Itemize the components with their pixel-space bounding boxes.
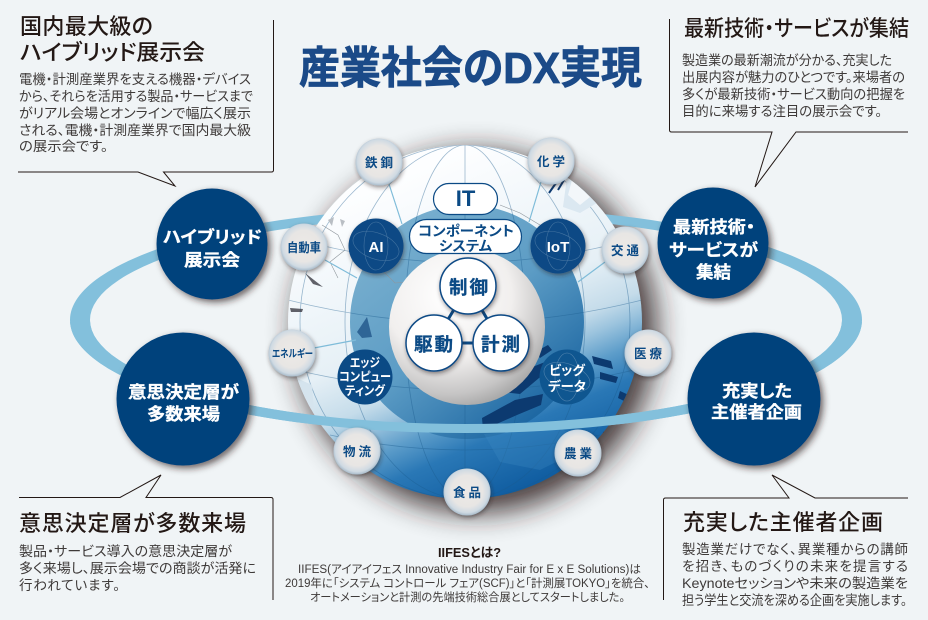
panel body: 製品・サービス導入の意思決定層が: [19, 544, 233, 559]
panel heading: [20, 14, 205, 65]
industry sphere: medical: [624, 330, 672, 376]
callout outline: [670, 19, 908, 187]
panel: about IIFES: [285, 545, 650, 604]
node: hybrid exhibition: 展示会: [184, 251, 240, 270]
callout outline: [18, 20, 274, 186]
about heading: IIFESとは?: [438, 545, 501, 560]
panel body: 製造業の最新潮流が分かる、充実した: [682, 53, 892, 68]
industry sphere: agriculture: [554, 430, 602, 476]
node: organizer programs: [688, 332, 820, 466]
tech badge: AI: AI: [368, 239, 384, 256]
control circle: [440, 258, 496, 314]
globe shadow: [295, 151, 657, 513]
panel heading: 意思決定層が多数来場: [19, 511, 246, 536]
industry sphere: automotive: 自動車: [287, 240, 321, 255]
industry sphere: transport: 交通: [611, 243, 639, 258]
panel body: 出展内容が魅力のひとつです。来場者の: [682, 69, 905, 85]
node: latest technology: 集結: [696, 263, 731, 282]
callout outline: [664, 475, 908, 600]
tech badge: AI: [348, 218, 404, 274]
panel body: の展示会です。: [19, 139, 108, 154]
panel body: 多くが最新技術・サービス動向の把握を: [682, 87, 905, 102]
drive circle: 駆動: [414, 334, 453, 355]
title: 産業社会のDX実現: [299, 44, 642, 93]
panel body: 目的に来場する注目の展示会です。: [682, 104, 882, 119]
tech badge: big data: データ: [548, 379, 586, 394]
panel: organizer programs: [664, 475, 908, 608]
globe grid and continents: [288, 145, 642, 499]
pill: component system: システム: [439, 238, 492, 254]
panel body: から、それらを活用する製品・サービスまで: [19, 89, 253, 104]
white core: [389, 249, 545, 405]
panel heading: ハイブリッド展示会: [20, 40, 205, 65]
measurement circle: [473, 315, 529, 371]
panel heading: 国内最大級の: [20, 14, 153, 39]
panel body: [682, 542, 908, 608]
panel: decision makers: [19, 475, 273, 600]
pill: component system: [410, 220, 522, 254]
about body: IIFES(アイアイフェス Innovative Industry Fair for E x E Solutions)は: [298, 563, 641, 576]
node: decision makers: [116, 332, 250, 466]
panel body: [19, 544, 256, 593]
panel body: 電機・計測産業界を支える機器・デバイス: [19, 71, 251, 87]
node: latest technology: [658, 188, 768, 298]
about body: [285, 563, 650, 604]
panel heading: 最新技術・サービスが集結: [684, 16, 909, 41]
tech badge: edge computing: [338, 350, 392, 404]
tech badge: IoT: [530, 218, 586, 274]
pill: IT: IT: [456, 186, 476, 211]
about body: 2019年に「システム コントロール フェア(SCF)」と「計測展TOKYO」を統合、: [285, 576, 650, 590]
industry sphere: medical: 医療: [634, 346, 662, 361]
panel body: 製造業だけでなく、異業種からの講師: [682, 542, 908, 557]
tech badge: IoT: IoT: [547, 239, 569, 256]
globe inner band: [350, 205, 584, 439]
industry sphere: energy: [268, 330, 316, 376]
industry sphere: steel: [356, 138, 402, 186]
orbit ring: front half: [70, 322, 862, 433]
node: hybrid exhibition: [156, 188, 268, 300]
node: hybrid exhibition: ハイブリッド: [163, 227, 262, 247]
panel body: 多く来場し、展示会場での商談が活発に: [19, 561, 256, 576]
tech badge: big data: ビッグ: [549, 363, 586, 378]
panel heading: 充実した主催者企画: [683, 510, 883, 535]
panel body: を招き、ものづくりの未来を提言する: [682, 559, 908, 574]
connector lines: [314, 182, 605, 348]
panel body: [682, 53, 905, 119]
node: decision makers: 意思決定層が: [128, 382, 239, 402]
industry sphere: automotive: [280, 224, 328, 270]
industry sphere: logistics: [334, 428, 380, 474]
measurement circle: 計測: [481, 334, 520, 355]
node: organizer programs: 充実した: [722, 382, 792, 401]
industry sphere: steel: 鉄鋼: [365, 155, 393, 170]
panel body: 担う学生と交流を深める企画を実施します。: [682, 593, 907, 608]
industry sphere: transport: [602, 226, 648, 274]
industry sphere: food: [444, 468, 490, 516]
panel body: [19, 71, 253, 154]
panel body: Keynoteセッションや未来の製造業を: [682, 576, 908, 591]
drive circle: [406, 315, 462, 371]
orbit ring: back half: [70, 207, 862, 433]
tech badge: edge computing: エッジ: [350, 356, 380, 370]
industry sphere: chemistry: 化学: [537, 154, 565, 169]
core sphere: [389, 249, 545, 405]
node: latest technology: 最新技術・: [673, 218, 755, 237]
industry sphere: energy: エネルギー: [272, 348, 313, 360]
control circle: 制御: [449, 277, 488, 298]
industry sphere: logistics: 物流: [343, 444, 371, 459]
globe sphere: [288, 145, 642, 499]
panel: hybrid exhibition: [18, 14, 274, 186]
globe: [288, 145, 642, 499]
tech badge: edge computing: コンピュー: [339, 370, 391, 384]
panel: latest technology: [670, 16, 909, 187]
core connectors: [434, 286, 501, 343]
pill: IT: [434, 184, 498, 214]
tech badge: big data: [540, 350, 594, 404]
panel body: 行われています。: [19, 578, 120, 593]
callout outline: [19, 475, 273, 600]
node: organizer programs: 主催者企画: [711, 402, 802, 422]
node: latest technology: サービスが: [669, 240, 758, 260]
industry sphere: food: 食品: [453, 485, 481, 500]
node: decision makers: 多数来場: [147, 404, 220, 424]
industry sphere: chemistry: [528, 138, 574, 184]
panel body: がリアル会場とオンラインで幅広く展示: [19, 106, 251, 121]
pill: component system: コンポーネント: [418, 223, 514, 239]
about body: オートメーションと計測の先端技術総合展としてスタートしました。: [310, 590, 625, 604]
panel body: される、電機・計測産業界で国内最大級: [19, 123, 252, 138]
industry sphere: agriculture: 農業: [564, 446, 592, 461]
tech badge: edge computing: ティング: [345, 383, 386, 398]
